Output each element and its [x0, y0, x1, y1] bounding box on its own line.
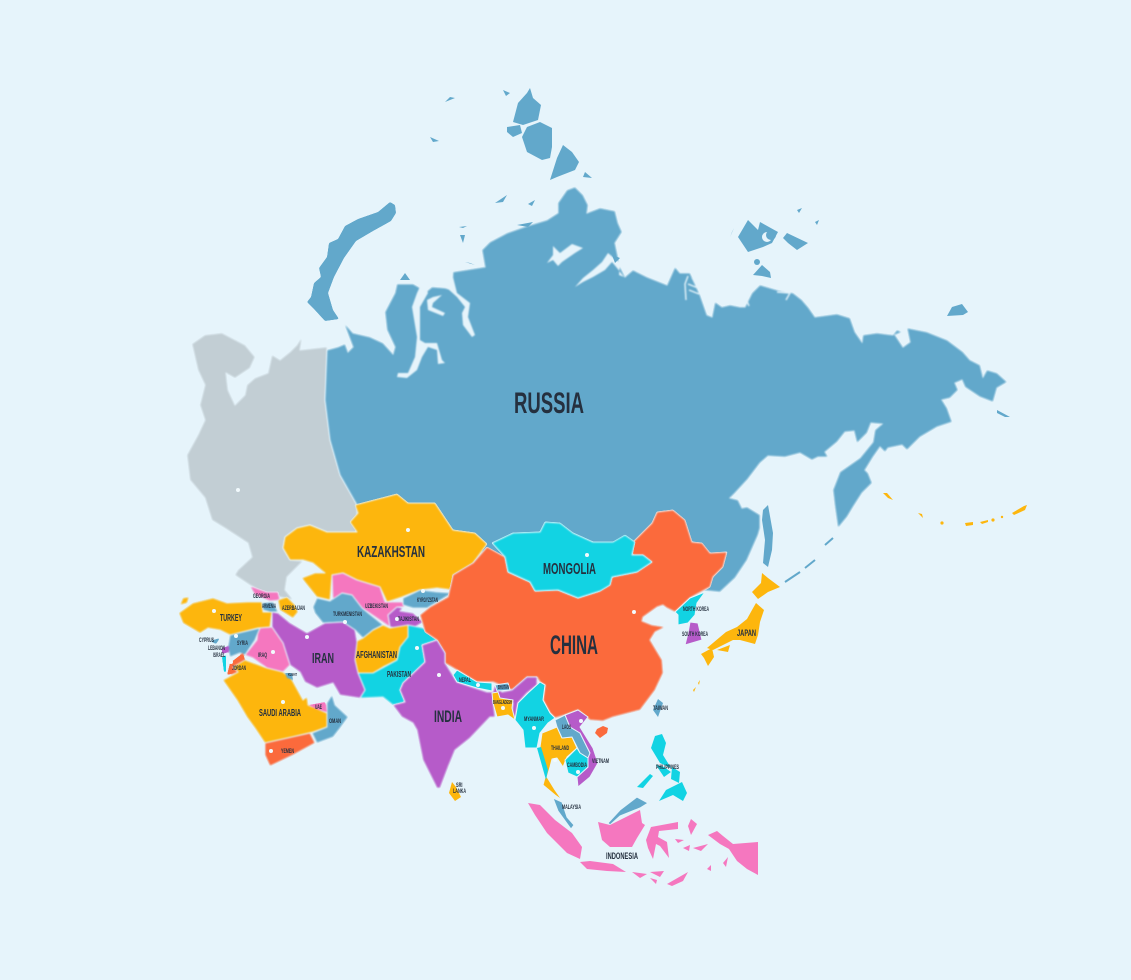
label: Israel: ISRAEL	[213, 653, 225, 659]
country: South Korea	[685, 622, 702, 645]
label: Syria: SYRIA	[237, 641, 248, 647]
label: Kazakhstan: KAZAKHSTAN	[357, 544, 425, 561]
island: Sakhalin	[762, 505, 773, 567]
label: South Korea: SOUTH KOREA	[682, 632, 708, 638]
country: Laos	[555, 715, 590, 758]
label: India: INDIA	[434, 707, 462, 726]
label: Taiwan: TAIWAN	[653, 706, 668, 712]
country: Afghanistan	[355, 625, 408, 673]
capital city dots	[212, 488, 636, 774]
label: Kyrgyzstan: KYRGYZSTAN	[417, 598, 438, 604]
label: Lebanon: LEBANON	[208, 646, 225, 652]
islands: Kurils	[785, 538, 833, 582]
label: Oman: OMAN	[329, 719, 341, 725]
countries of central and western Asia	[179, 494, 487, 766]
label: Armenia: ARMENIA	[262, 604, 276, 610]
country: Malaysia	[553, 797, 648, 829]
country: Azerbaijan	[278, 597, 298, 618]
country: UAE	[309, 702, 327, 712]
label: Afghanistan: AFGHANISTAN	[356, 649, 397, 661]
country: Vietnam	[565, 710, 598, 787]
country: Mongolia	[492, 522, 652, 598]
label: Turkmenistan: TURKMENISTAN	[333, 612, 362, 618]
country: Kyrgyzstan	[403, 590, 452, 608]
country: Myanmar	[515, 682, 555, 748]
country: Bhutan	[495, 683, 510, 691]
label: Mongolia: MONGOLIA	[543, 561, 596, 578]
country: Cyprus	[210, 638, 220, 644]
islands: Aleutians	[883, 493, 1027, 526]
label: Pakistan: PAKISTAN	[387, 669, 411, 679]
label: Vietnam: VIETNAM	[592, 759, 609, 765]
inlet: Ob gulf	[397, 280, 445, 378]
delta: Lena	[685, 276, 790, 306]
country: Pakistan	[358, 625, 437, 705]
country: Georgia	[250, 586, 280, 601]
country: Iraq	[245, 627, 290, 672]
country: Tajikistan	[388, 607, 423, 628]
label: Indonesia: INDONESIA	[606, 851, 638, 861]
country: Oman	[312, 695, 348, 743]
label: Georgia: GEORGIA	[253, 594, 270, 600]
country: western Russia	[187, 333, 357, 600]
label: North Korea: NORTH KOREA	[683, 607, 709, 613]
islands: New Siberian	[730, 208, 1010, 417]
country: Thailand	[540, 727, 577, 800]
country: Sri Lanka	[449, 782, 461, 801]
label: Philippines: PHILIPPINES	[656, 765, 679, 771]
country: Yemen	[265, 733, 315, 766]
label: Yemen: YEMEN	[281, 749, 294, 755]
label: Kuwait: KUWAIT	[288, 672, 297, 677]
label: Saudi Arabia: SAUDI ARABIA	[259, 708, 301, 719]
label: Bangladesh: BANGLADESH	[493, 700, 512, 706]
label: Japan: JAPAN	[737, 628, 756, 639]
country: Taiwan	[653, 699, 663, 717]
country: Myanmar south	[537, 747, 548, 780]
label: Iran: IRAN	[312, 650, 334, 667]
label: Nepal: NEPAL	[459, 678, 471, 684]
label: Jordan: JORDAN	[232, 666, 246, 672]
inlet: Khatanga	[575, 253, 624, 287]
country: Nepal	[453, 670, 492, 691]
label: Sri Lanka second line: LANKA	[453, 789, 466, 795]
country: Israel	[222, 655, 226, 672]
label: Tajikistan: TAJIKISTAN	[398, 617, 419, 623]
country: Saudi Arabia	[223, 660, 327, 743]
country: Philippines	[637, 734, 687, 801]
country: Armenia	[262, 602, 278, 612]
country: Uzbekistan	[332, 573, 412, 627]
country: Lebanon	[222, 646, 229, 654]
country: Kazakhstan	[283, 494, 487, 602]
label: Cambodia: CAMBODIA	[567, 763, 587, 769]
country name labels	[199, 387, 756, 861]
label: Sri Lanka: SRI	[456, 783, 463, 789]
label: UAE: UAE	[315, 705, 322, 711]
label: Uzbekistan: UZBEKISTAN	[365, 604, 388, 610]
label: Thailand: THAILAND	[551, 746, 569, 752]
label: Laos: LAOS	[562, 725, 571, 731]
label: Cyprus: CYPRUS	[199, 638, 214, 644]
inlet: Yenisei	[447, 277, 475, 337]
lake: Taymyr	[547, 244, 583, 266]
label: Azerbaijan: AZERBAIJAN	[282, 606, 305, 612]
country: Bangladesh	[492, 692, 515, 720]
label: China: CHINA	[550, 630, 598, 660]
label: Malaysia: MALAYSIA	[562, 805, 581, 811]
country: Kuwait	[285, 673, 293, 680]
country: Jordan	[227, 653, 245, 675]
mainland with inlets	[325, 187, 1007, 592]
country: China	[420, 510, 727, 721]
country: Russia	[307, 88, 1010, 592]
countries of south and east Asia	[393, 510, 780, 886]
label: Turkey: TURKEY	[220, 613, 242, 624]
country: Japan	[693, 573, 780, 692]
inlet: Taz	[427, 295, 445, 316]
islands: Severnaya Zemlya	[400, 88, 620, 280]
label: Bhutan: BHUTAN	[498, 685, 509, 691]
country: Syria	[228, 628, 260, 657]
country: Cambodia	[565, 748, 588, 777]
country: Iran	[272, 612, 365, 698]
country: Turkey	[179, 597, 272, 635]
island: Hainan	[595, 726, 608, 738]
country: India	[393, 640, 537, 788]
country: North Korea	[675, 592, 705, 625]
country: Indonesia	[528, 803, 758, 886]
island: Novaya Zemlya	[307, 202, 396, 321]
label: Russia: RUSSIA	[514, 387, 584, 420]
country: Turkmenistan	[313, 593, 383, 638]
label: Myanmar: MYANMAR	[524, 717, 544, 723]
label: Iraq: IRAQ	[258, 653, 267, 659]
